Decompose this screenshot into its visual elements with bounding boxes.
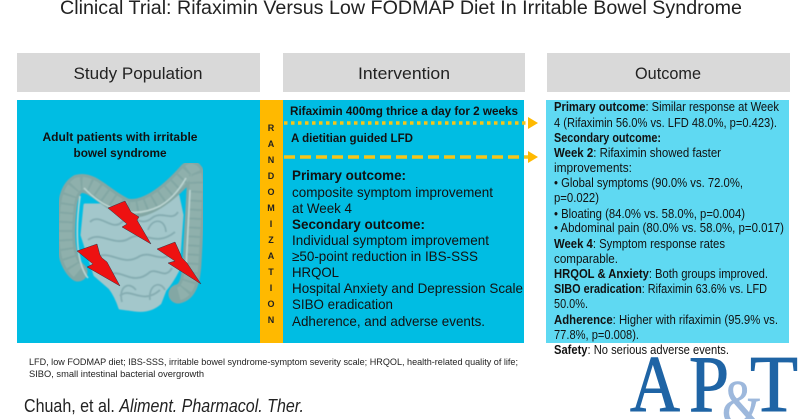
randomization bar bbox=[260, 100, 283, 343]
randomization bar: A bbox=[268, 251, 275, 261]
endpoints text: Hospital Anxiety and Depression Scale bbox=[292, 280, 523, 296]
outcome text: • Abdominal pain (80.0% vs. 58.0%, p=0.017) bbox=[554, 221, 784, 235]
icon: pain bolt left bbox=[77, 244, 120, 286]
randomization bar: R bbox=[268, 123, 275, 133]
outcome text: • Bloating (84.0% vs. 58.0%, p=0.004) bbox=[554, 207, 745, 221]
endpoints text: SIBO eradication bbox=[292, 296, 393, 312]
outcome text: Secondary outcome: bbox=[554, 131, 661, 145]
icon: pain bolt top bbox=[108, 201, 151, 244]
heading: outcome bbox=[547, 53, 790, 92]
randomization bar: Z bbox=[268, 235, 274, 245]
endpoints text: HRQOL bbox=[292, 264, 339, 280]
randomization bar: I bbox=[270, 283, 272, 293]
heading: study population: Study Population bbox=[74, 64, 202, 83]
abbreviations footnote: LFD, low FODMAP diet; IBS-SSS, irritable bowel syndrome-symptom severity scale; HRQOL, health-related quality of life; bbox=[29, 357, 518, 368]
outcome text: p=0.022) bbox=[554, 191, 599, 205]
endpoints text: Individual symptom improvement bbox=[292, 232, 489, 248]
abbreviations footnote: SIBO, small intestinal bacterial overgrowth bbox=[29, 369, 204, 380]
outcome text bbox=[554, 100, 784, 342]
outcome text: • Global symptoms (90.0% vs. 72.0%, bbox=[554, 176, 743, 190]
endpoints text: composite symptom improvement bbox=[292, 184, 493, 200]
endpoints text: Secondary outcome: bbox=[292, 216, 425, 232]
panel: outcome bbox=[546, 100, 789, 343]
randomization bar: M bbox=[267, 203, 275, 213]
heading: intervention bbox=[283, 53, 525, 92]
outcome text: Primary outcome: Similar response at Week bbox=[554, 100, 780, 114]
outcome text: improvements: bbox=[554, 161, 632, 175]
panel: intervention bbox=[283, 100, 538, 343]
logo: AP&T bbox=[630, 341, 798, 419]
endpoints text: Primary outcome: bbox=[292, 167, 406, 183]
icon: pain bolt right bbox=[157, 242, 201, 284]
population label: bowel syndrome bbox=[74, 146, 167, 160]
abbreviations footnote bbox=[29, 357, 518, 380]
outcome text: SIBO eradication: Rifaximin 63.6% vs. LFD bbox=[554, 282, 767, 296]
population label bbox=[42, 130, 198, 160]
population label: Adult patients with irritable bbox=[42, 130, 198, 144]
outcome text: Week 4: Symptom response rates bbox=[554, 237, 725, 251]
randomization bar: N bbox=[268, 155, 274, 165]
randomization bar: I bbox=[270, 219, 272, 229]
endpoints text: ≥50-point reduction in IBS-SSS bbox=[292, 248, 478, 264]
arm: LFD: A dietitian guided LFD bbox=[291, 131, 413, 145]
randomization bar: N bbox=[268, 315, 274, 325]
endpoints text bbox=[292, 167, 523, 329]
outcome text: 4 (Rifaximin 56.0% vs. LFD 48.0%, p=0.423). bbox=[554, 116, 777, 130]
outcome text: 77.8%, p=0.008). bbox=[554, 328, 639, 342]
outcome text: Adherence: Higher with rifaximin (95.9% vs. bbox=[554, 313, 778, 327]
randomization bar: O bbox=[267, 187, 275, 197]
heading: outcome: Outcome bbox=[635, 64, 701, 83]
heading: intervention: Intervention bbox=[358, 64, 450, 83]
outcome text: comparable. bbox=[554, 252, 618, 266]
panel: study population bbox=[17, 100, 260, 343]
arm: rifaximin: Rifaximin 400mg thrice a day for 2 weeks bbox=[290, 104, 518, 118]
citation: Chuah, et al. Aliment. Pharmacol. Ther. bbox=[24, 396, 304, 416]
endpoints text: at Week 4 bbox=[292, 200, 352, 216]
randomization bar: T bbox=[268, 267, 274, 277]
icon: intestines bbox=[66, 170, 196, 310]
outcome text: Week 2: Rifaximin showed faster bbox=[554, 146, 721, 160]
randomization bar: A bbox=[268, 139, 275, 149]
heading: study population bbox=[17, 53, 260, 92]
randomization bar: D bbox=[268, 171, 275, 181]
randomization bar: O bbox=[267, 299, 275, 309]
arrow: LFD to outcome bbox=[284, 151, 538, 163]
outcome text: 50.0%. bbox=[554, 297, 588, 311]
arrow: rifaximin to outcome bbox=[284, 117, 538, 129]
endpoints text: Adherence, and adverse events. bbox=[292, 313, 485, 329]
safety text: Safety: No serious adverse events. bbox=[554, 343, 729, 357]
outcome text: HRQOL & Anxiety: Both groups improved. bbox=[554, 267, 768, 281]
